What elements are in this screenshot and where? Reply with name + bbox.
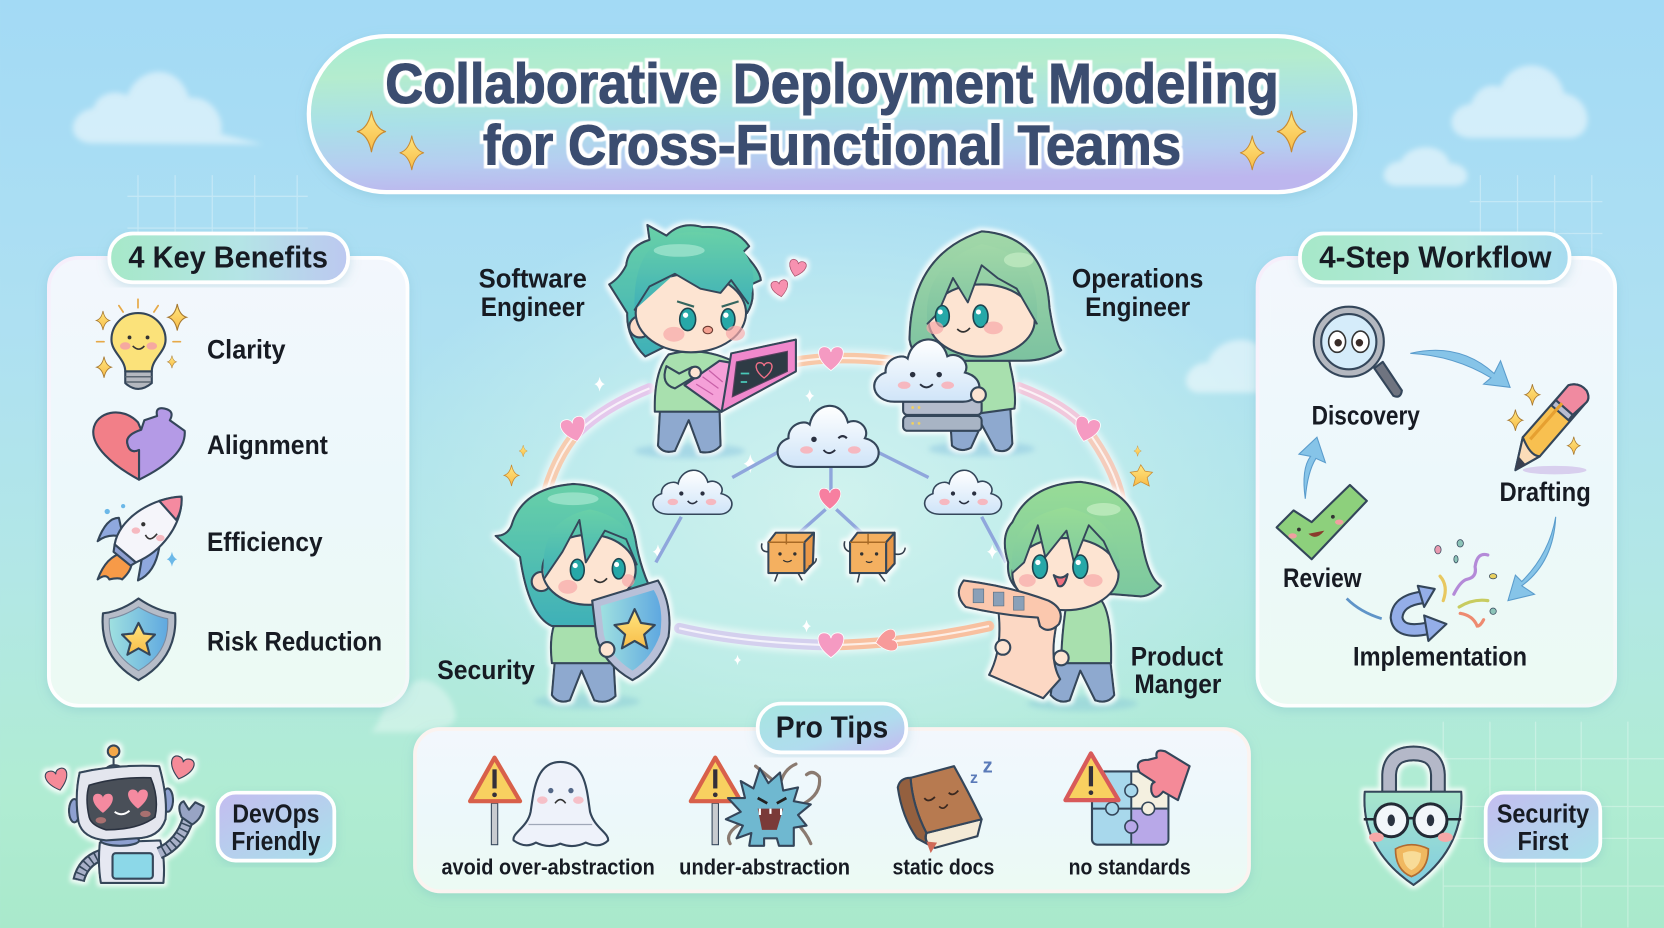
character: product manager [959, 482, 1161, 711]
badge: Security First: First [1518, 828, 1569, 856]
label: Software Engineer: Software [479, 264, 587, 294]
icon: implementation arrows and confetti [1397, 540, 1497, 641]
cloud: top left [73, 72, 263, 144]
icon: ring hearts [559, 347, 1102, 658]
label: Product Manager: Product [1131, 641, 1223, 671]
arrow: drafting to implementation [1508, 517, 1556, 601]
label: Operations Engineer: Operations [1072, 264, 1203, 294]
text: Drafting: Drafting [1499, 477, 1591, 507]
heading: 4-step workflow [1300, 233, 1570, 282]
text: Risk Reduction: Risk Reduction [207, 627, 382, 657]
icon: connector heart [819, 488, 841, 509]
icon: title sparkles [357, 111, 1306, 170]
icon: right cloud [925, 470, 1001, 514]
arrow: discovery to drafting [1410, 350, 1510, 387]
panel: 4-step workflow [1258, 233, 1615, 706]
label: Operations Engineer: Engineer [1085, 292, 1190, 322]
character: software engineer [609, 225, 807, 458]
title text: Collaborative Deployment Modeling [385, 52, 1279, 115]
icon: ring sparkles [504, 445, 1152, 486]
heading: pro tips [758, 704, 906, 752]
character: operations engineer [874, 231, 1061, 456]
text: no standards: no standards [1069, 854, 1191, 879]
text: static docs: static docs [892, 854, 994, 879]
icon: hearts [770, 258, 807, 298]
label: Product Manager [1131, 641, 1223, 699]
title text [385, 52, 1279, 176]
cloud: small right [1384, 147, 1467, 186]
label: Security: Security [437, 655, 535, 685]
title text: for Cross-Functional Teams [483, 113, 1181, 176]
text: snore letters [970, 756, 993, 787]
cloud: mid right [1186, 340, 1259, 393]
badge: Security First [1486, 793, 1600, 861]
text: under-abstraction: under-abstraction [679, 854, 850, 879]
panel: 4 key benefits [49, 233, 408, 706]
text: Efficiency: Efficiency [207, 527, 323, 557]
diagram: collaboration ring [504, 347, 1152, 665]
icon: warning sign and puzzle [1065, 751, 1190, 845]
badge: DevOps Friendly: Friendly [231, 828, 321, 856]
text: Review: Review [1283, 563, 1362, 593]
icon: box character left [762, 533, 816, 582]
icon: shield with star [103, 599, 175, 680]
label: Product Manager: Manger [1134, 669, 1221, 699]
text: Implementation: Implementation [1353, 641, 1527, 671]
text: snore letters: z [970, 770, 978, 787]
label: Operations Engineer [1072, 264, 1203, 322]
icon: left cloud [653, 470, 732, 514]
icon: magnifier [1314, 307, 1402, 397]
icon: heart puzzle [93, 408, 185, 480]
diagram: cloud deployment tree [653, 406, 1006, 583]
badge: Security First: Security [1497, 800, 1590, 828]
heading: 4-step workflow: 4-Step Workflow [1319, 239, 1552, 274]
panel: pro tips [415, 704, 1249, 891]
icon: server stack [903, 399, 982, 431]
icon: sleeping book [898, 756, 993, 853]
icon: scroll [959, 580, 1069, 698]
text: avoid over-abstraction: avoid over-abstraction [441, 854, 655, 879]
character: security [496, 484, 670, 709]
badge: DevOps Friendly [218, 793, 334, 861]
icon: box character right [844, 533, 905, 583]
cloud: bottom left [371, 680, 455, 732]
heading: 4 key benefits: 4 Key Benefits [128, 239, 328, 274]
icon: hero shield [592, 580, 670, 680]
icon: robot hearts [44, 755, 195, 793]
heading: 4 key benefits [109, 233, 348, 282]
arrow: review to discovery [1299, 437, 1325, 499]
cloud: top right [1452, 65, 1587, 138]
icon: pink laptop [665, 340, 796, 412]
label: Software Engineer [479, 264, 587, 322]
icon: smiling check mark [1277, 485, 1367, 559]
text: Clarity: Clarity [207, 335, 286, 365]
icon: main cloud [778, 406, 879, 467]
icon: warning sign and monster [691, 758, 820, 846]
badge: DevOps Friendly: DevOps [232, 800, 319, 828]
label: Software Engineer: Engineer [481, 292, 585, 322]
icon: rocket [98, 497, 182, 580]
text: snore letters: z [983, 756, 993, 778]
mascot: lock [1364, 753, 1461, 885]
icon: warning sign and ghost [470, 758, 608, 846]
text: Discovery: Discovery [1312, 400, 1420, 430]
icon: light bulb [96, 299, 187, 389]
icon: pencil [1508, 384, 1588, 474]
title banner [309, 36, 1355, 192]
icon: held cloud [874, 339, 986, 402]
mascot: robot [44, 745, 204, 883]
arrow: implementation to review [1347, 599, 1382, 619]
text: Alignment: Alignment [207, 430, 328, 460]
heading: pro tips: Pro Tips [776, 710, 888, 745]
